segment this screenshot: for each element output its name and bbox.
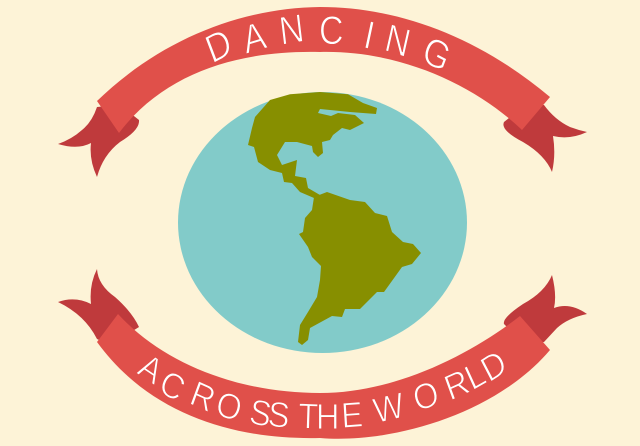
south america <box>298 192 421 345</box>
left tail <box>58 269 139 345</box>
north america <box>248 92 377 200</box>
globe <box>178 92 467 353</box>
ribbon <box>97 314 550 439</box>
title text: across the world: ACROSS THE WORLD <box>132 343 513 437</box>
title text: dancing: DANCING <box>199 5 457 81</box>
top banner <box>58 5 587 177</box>
bottom banner <box>58 269 587 439</box>
left tail <box>58 105 139 177</box>
right tail <box>503 105 587 172</box>
right tail <box>504 275 587 345</box>
ribbon <box>97 7 550 133</box>
